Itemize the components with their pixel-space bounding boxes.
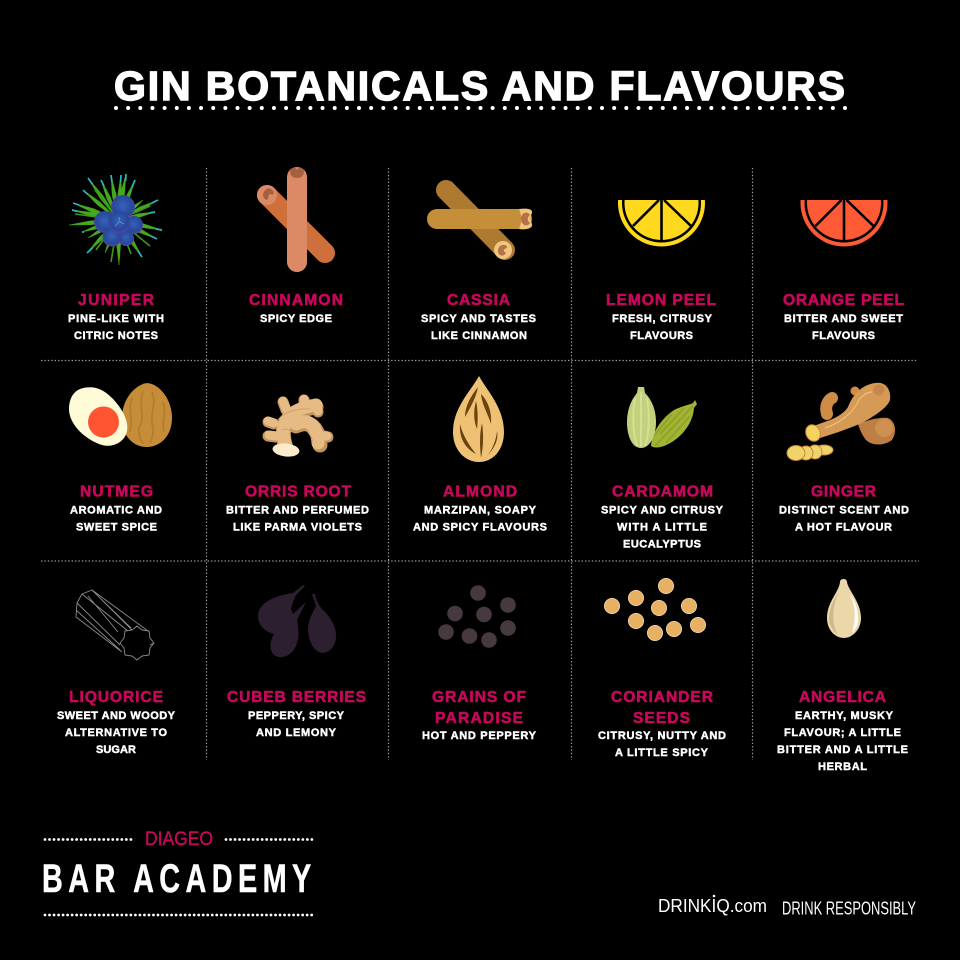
panel: nutmeg: SWEET SPICE bbox=[76, 522, 157, 534]
panel: almond: AND SPICY FLAVOURS bbox=[413, 522, 547, 534]
panel: liquorice bbox=[57, 590, 176, 756]
panel: angelica: BITTER AND A LITTLE bbox=[777, 744, 908, 756]
icon: lemon slice bbox=[618, 200, 705, 246]
panel: ginger: GINGER bbox=[811, 484, 876, 500]
panel: lemon peel bbox=[606, 200, 716, 340]
panel: ginger: A HOT FLAVOUR bbox=[795, 522, 892, 534]
logo: Diageo Bar Academy bbox=[42, 829, 313, 915]
panel: cubeb berries bbox=[227, 585, 366, 739]
title: GIN BOTANICALS AND FLAVOURS bbox=[114, 63, 845, 109]
panel: cassia: SPICY AND TASTES bbox=[421, 313, 536, 325]
panel: orris root bbox=[226, 399, 369, 534]
panel: cubeb berries: PEPPERY, SPICY bbox=[248, 710, 345, 722]
panel: orange peel: FLAVOURS bbox=[812, 330, 875, 342]
panel: orris root: ORRIS ROOT bbox=[245, 484, 351, 500]
panel: coriander seeds: SEEDS bbox=[633, 710, 690, 727]
panel: ginger: DISTINCT SCENT AND bbox=[779, 504, 909, 516]
panel: orris root: LIKE PARMA VIOLETS bbox=[233, 522, 362, 534]
panel: lemon peel: LEMON PEEL bbox=[606, 292, 716, 309]
icon: ginger bbox=[787, 383, 895, 460]
panel: cassia: CASSIA bbox=[447, 292, 510, 309]
panel: angelica bbox=[777, 579, 908, 773]
logo: Diageo Bar Academy: BAR ACADEMY bbox=[42, 856, 311, 901]
panel: almond bbox=[413, 376, 547, 534]
panel: angelica: EARTHY, MUSKY bbox=[795, 710, 894, 722]
icon: cinnamon bbox=[257, 168, 325, 262]
icon: liquorice bbox=[76, 590, 154, 660]
panel: liquorice: SUGAR bbox=[96, 744, 136, 756]
panel: cubeb berries: AND LEMONY bbox=[256, 727, 337, 739]
panel: cubeb berries: CUBEB BERRIES bbox=[227, 689, 366, 706]
logo: DrinkIQ: DRINKIQ.com bbox=[658, 895, 767, 916]
icon: angelica seed bbox=[827, 579, 861, 638]
icon: orris root bbox=[268, 399, 328, 458]
panel: cardamom: SPICY AND CITRUSY bbox=[601, 504, 724, 516]
panel: juniper: PINE-LIKE WITH bbox=[68, 313, 164, 325]
panel: cardamom: EUCALYPTUS bbox=[623, 538, 701, 550]
icon: cubeb berries bbox=[258, 585, 336, 657]
panel: angelica: ANGELICA bbox=[799, 689, 886, 706]
icon: cassia bbox=[437, 190, 532, 259]
panel: orange peel: BITTER AND SWEET bbox=[784, 313, 903, 325]
icon: cardamom bbox=[627, 387, 697, 448]
panel: cardamom: WITH A LITTLE bbox=[617, 522, 707, 534]
panel: cinnamon: CINNAMON bbox=[249, 292, 343, 309]
panel: lemon peel: FRESH, CITRUSY bbox=[612, 313, 713, 325]
icon: coriander seeds bbox=[604, 578, 706, 641]
panel: liquorice: SWEET AND WOODY bbox=[57, 710, 176, 722]
panel: juniper: JUNIPER bbox=[78, 292, 154, 309]
logo: Diageo Bar Academy: DIAGEO bbox=[145, 829, 213, 850]
icon: orange slice bbox=[800, 200, 888, 246]
icon: juniper bbox=[69, 174, 162, 265]
panel: angelica: FLAVOUR; A LITTLE bbox=[784, 727, 901, 739]
panel: orange peel: ORANGE PEEL bbox=[783, 292, 904, 309]
panel: coriander seeds: A LITTLE SPICY bbox=[615, 747, 709, 759]
panel: cardamom bbox=[601, 387, 724, 550]
panel: cassia: LIKE CINNAMON bbox=[431, 330, 527, 342]
panel: grains of paradise: GRAINS OF bbox=[432, 689, 526, 706]
panel: grains of paradise: PARADISE bbox=[435, 710, 523, 727]
panel: cassia bbox=[421, 190, 536, 342]
panel: juniper bbox=[68, 174, 164, 342]
panel: orris root: BITTER AND PERFUMED bbox=[226, 504, 369, 516]
panel: juniper: CITRIC NOTES bbox=[74, 330, 158, 342]
panel: almond: ALMOND bbox=[443, 484, 517, 500]
panel: cinnamon: SPICY EDGE bbox=[260, 313, 332, 325]
panel: angelica: HERBAL bbox=[818, 761, 867, 773]
panel: cinnamon bbox=[249, 168, 343, 325]
panel: nutmeg bbox=[69, 383, 172, 534]
icon: almond bbox=[453, 376, 504, 462]
panel: ginger bbox=[779, 383, 909, 534]
panel: liquorice: ALTERNATIVE TO bbox=[65, 727, 167, 739]
panel: orange peel bbox=[783, 200, 904, 340]
panel: nutmeg: AROMATIC AND bbox=[70, 504, 162, 516]
panel: grains of paradise bbox=[422, 585, 537, 742]
panel: coriander seeds bbox=[598, 578, 726, 759]
icon: nutmeg bbox=[69, 383, 172, 447]
panel: liquorice: LIQUORICE bbox=[69, 689, 163, 706]
panel: almond: MARZIPAN, SOAPY bbox=[424, 504, 537, 516]
panel: nutmeg: NUTMEG bbox=[80, 484, 153, 500]
panel: grains of paradise: HOT AND PEPPERY bbox=[422, 730, 537, 742]
panel: lemon peel: FLAVOURS bbox=[630, 330, 693, 342]
panel: cardamom: CARDAMOM bbox=[612, 484, 713, 500]
icon: grains of paradise bbox=[438, 585, 516, 648]
panel: coriander seeds: CITRUSY, NUTTY AND bbox=[598, 730, 726, 742]
panel: coriander seeds: CORIANDER bbox=[611, 689, 713, 706]
